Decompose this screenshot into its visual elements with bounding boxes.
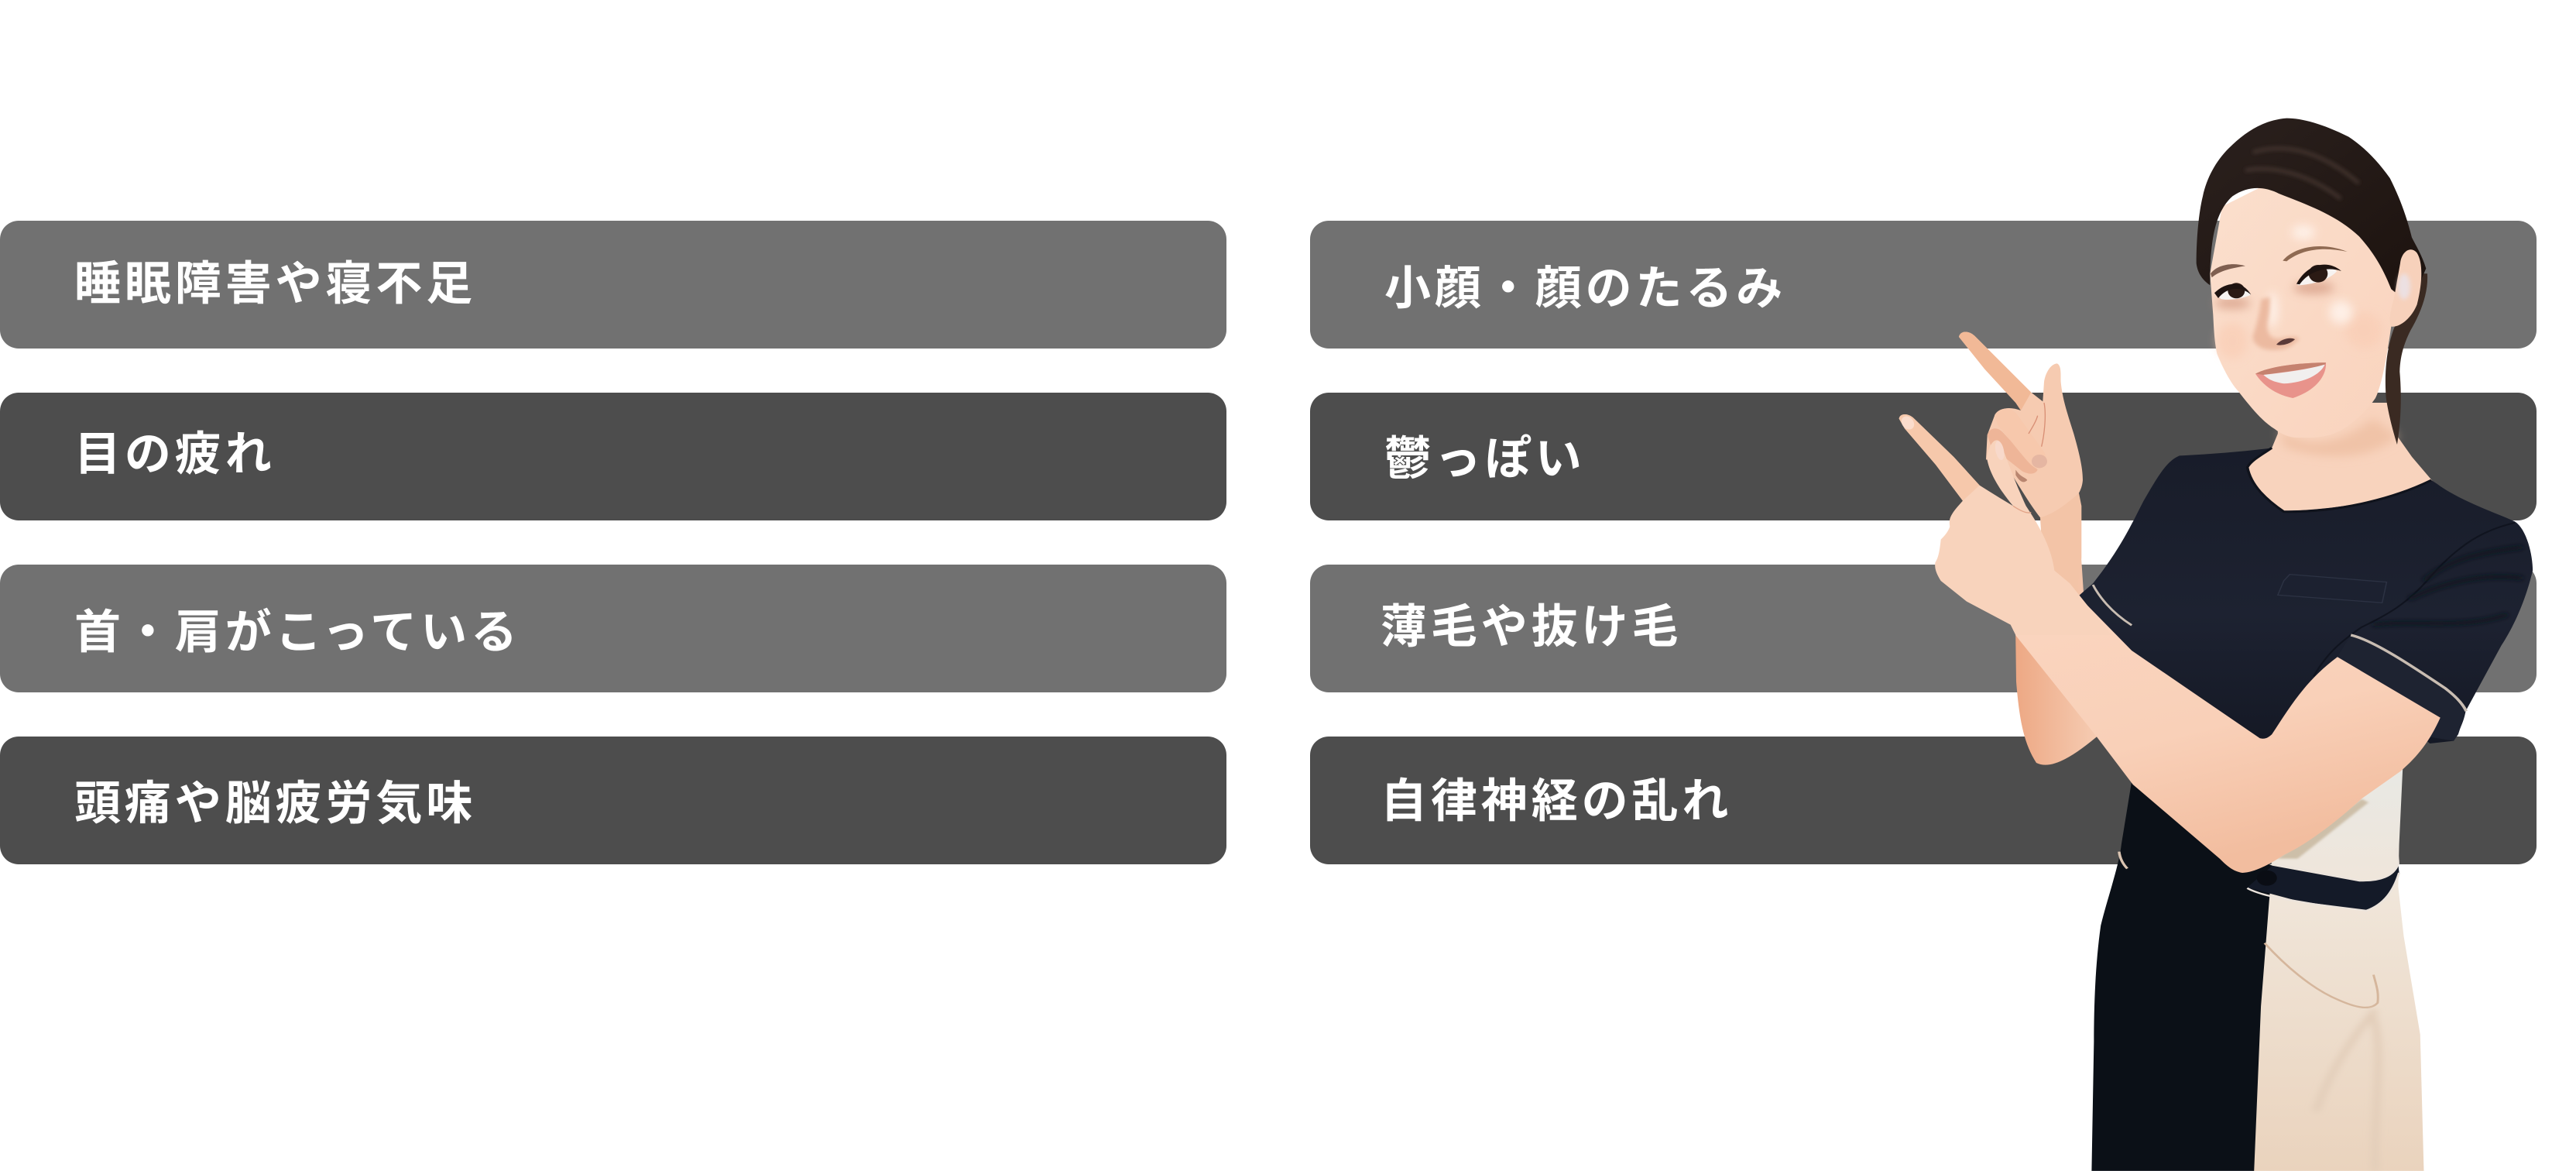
text: headache: 頭痛や脳疲労気味 [74,778,476,829]
cheek blush [2217,312,2382,359]
woman: neck, navy top and upper arm [2015,403,2533,873]
index finger tone [1899,414,1980,501]
ear [2390,249,2421,327]
under-eye shadows [2214,282,2334,309]
left sleeve piping [2093,585,2132,625]
right eye [2296,265,2341,285]
woman: apron and dress [2091,768,2423,1171]
mouth [2255,362,2326,398]
panel: eye fatigue row [0,393,1226,520]
hair shine [2245,149,2359,199]
hair cap [2197,118,2426,304]
black dress panel [2091,774,2272,1171]
apron pocket [2265,943,2378,1008]
neckline stitch [2248,448,2431,512]
woman: head [2197,118,2427,445]
woman: front hand [1899,414,2111,635]
gap shadow under fingers [2015,470,2027,482]
panel: face sagging row [1310,221,2537,349]
panel: autonomic nerves row [1310,737,2537,864]
top body [2063,448,2533,751]
ring finger [1988,428,2038,474]
text: face sagging: 小顔・顔のたるみ [1384,263,1786,314]
woman: rear arm [2015,542,2100,765]
front arm [2015,572,2441,873]
sleeve folds [2373,548,2523,625]
text: autonomic nerves: 自律神経の乱れ [1381,775,1732,827]
panel: thinning hair row [1310,565,2537,692]
text: thinning hair: 薄毛や抜け毛 [1381,601,1682,653]
folded middle finger [1995,409,2046,469]
panel: depression row [1310,393,2537,520]
waist belt [2247,864,2399,911]
palm and raised fingers [1959,331,2083,517]
panel: sleep disorder row [0,221,1226,349]
sleeve seam [2314,523,2515,676]
neck shadow [2281,418,2397,456]
wrist [2040,493,2081,592]
index finger tone [1959,331,2031,410]
panel: headache row [0,737,1226,864]
pointing fingernail [1899,414,1917,432]
facial highlights [2267,225,2352,328]
chest pocket [2278,575,2386,603]
text: depression: 鬱っぽい [1384,433,1586,485]
thumb nail [1994,440,2006,461]
face [2210,184,2398,438]
inner ear [2398,273,2410,300]
right eyebrow [2283,246,2348,261]
apron folds [2316,1010,2379,1171]
belt piping [2247,848,2399,911]
neck [2245,403,2433,513]
left eyebrow [2211,264,2245,277]
left eye [2214,283,2251,300]
right sleeve cuff [2338,635,2465,741]
palm crease [2029,403,2045,447]
nose [2252,297,2300,350]
hair strands and ponytail [2386,273,2427,445]
beige apron panel [2252,768,2423,1171]
woman: rear hand [1959,331,2083,592]
text: eye fatigue: 目の疲れ [74,428,276,480]
side piping [2119,852,2128,868]
text: stiff neck: 首・肩がこっている [74,606,521,658]
thumb crease [2013,506,2031,513]
right cuff piping [2351,635,2466,711]
panel: stiff neck row [0,565,1226,692]
fingernail [2032,455,2047,468]
text: sleep disorder: 睡眠障害や寝不足 [74,258,476,310]
apron shadow under arm [2277,799,2368,859]
belt button [2257,871,2277,886]
